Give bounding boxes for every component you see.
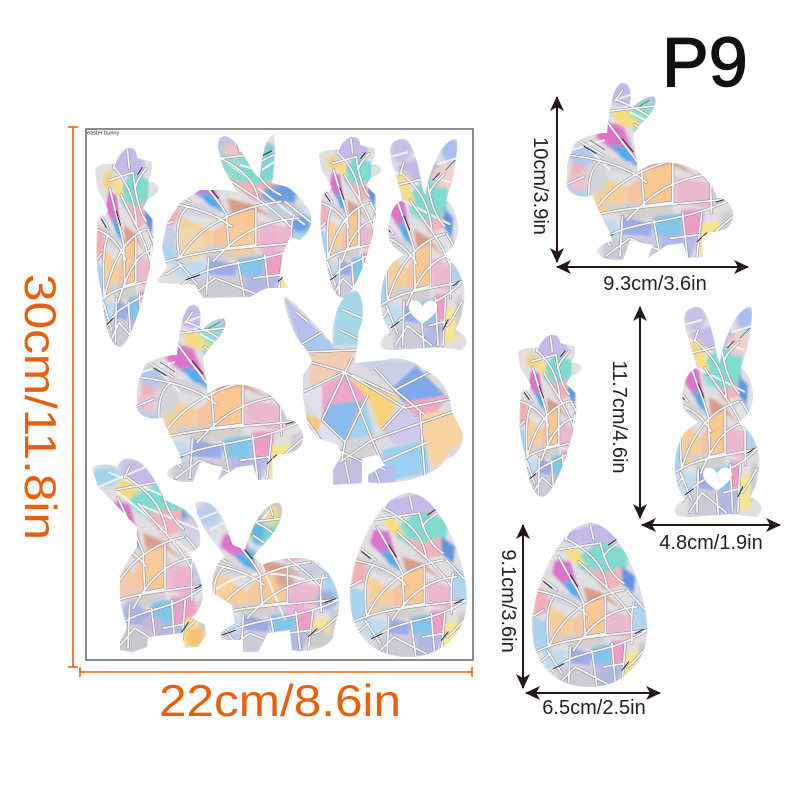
sheet border <box>86 129 473 660</box>
arrow: egg width <box>526 692 660 694</box>
sticker: tall bunny detail <box>669 300 765 525</box>
label: rabbit height: 10cm/3.9in <box>529 137 551 235</box>
label: bunny width: 4.8cm/1.9in <box>659 532 763 554</box>
sheet sticker: egg <box>350 493 467 657</box>
label: bunny height: 11.7cm/4.6in <box>608 360 630 474</box>
arrow: rabbit height <box>556 97 558 262</box>
sheet sticker: small carrot <box>319 136 382 298</box>
label: rabbit width: 9.3cm/3.6in <box>603 273 707 295</box>
sheet sticker: carrot left <box>95 147 159 347</box>
arrow: bunny width <box>642 524 780 526</box>
arrow: bunny height <box>639 307 641 518</box>
sheet sticker: rabbit facing right <box>157 134 312 298</box>
sheet sticker: upright rabbit <box>91 458 207 652</box>
sheet sticker: tall bunny <box>375 132 470 358</box>
sticker: rabbit detail <box>567 80 733 260</box>
sheet sticker: crouching rabbit <box>195 500 340 652</box>
sticker: carrot detail <box>518 334 582 497</box>
label: egg height: 9.1cm/3.6in <box>497 549 519 653</box>
sheet sticker: rabbit facing left <box>137 302 303 482</box>
dimension line: sheet height <box>68 127 78 667</box>
label: sheet height: 30cm/11.8in <box>16 274 66 540</box>
title: P9: P9 <box>662 23 748 101</box>
label: egg width: 6.5cm/2.5in <box>542 697 646 719</box>
sheet caption: easter bunny <box>87 130 120 136</box>
dimension line: sheet width <box>80 667 472 677</box>
sticker: egg detail <box>532 523 647 687</box>
arrow: egg height <box>522 525 524 688</box>
sheet sticker: large rabbit <box>284 290 465 485</box>
label: sheet width: 22cm/8.6in <box>159 675 401 725</box>
arrow: rabbit width <box>557 266 748 268</box>
panel: sticker sheet <box>86 129 473 660</box>
